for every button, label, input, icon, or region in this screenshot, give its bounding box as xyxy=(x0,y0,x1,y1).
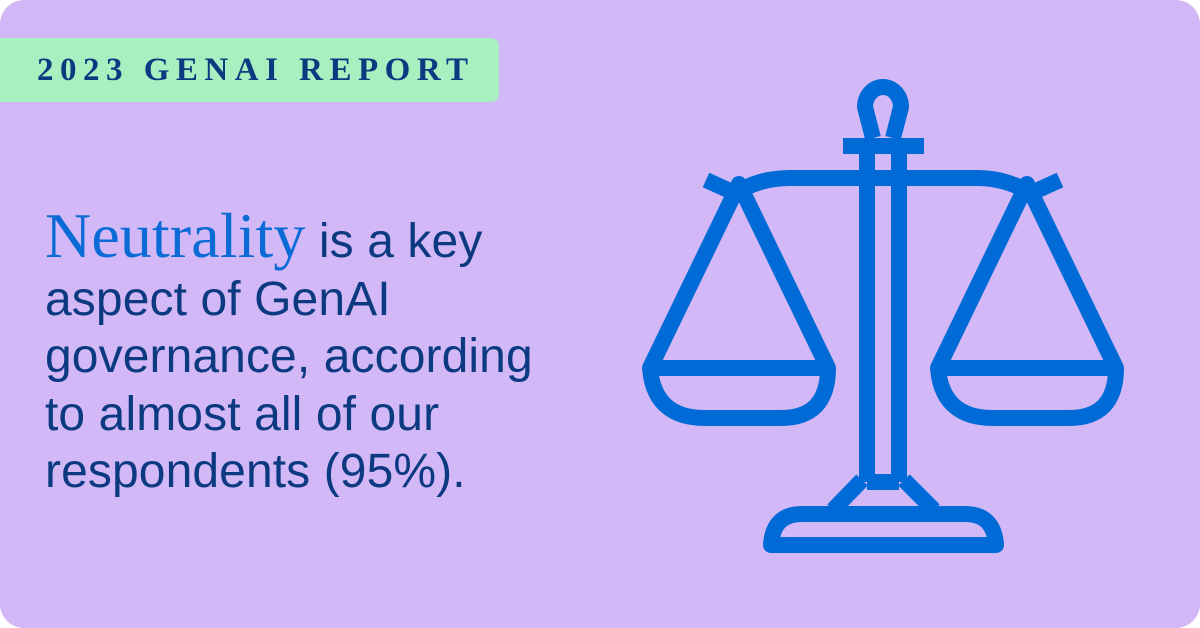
tag: report label xyxy=(0,38,499,102)
tag: report label: 2023 GENAI REPORT xyxy=(37,52,475,88)
loop xyxy=(865,87,901,138)
headline text: aspect of GenAI xyxy=(45,272,391,326)
headline text: respondents (95%). xyxy=(45,445,466,498)
foot xyxy=(771,514,996,545)
crossbar xyxy=(843,138,924,154)
headline text xyxy=(45,200,533,498)
beam xyxy=(745,178,1021,188)
pillar xyxy=(859,154,875,482)
headline text: governance, according xyxy=(45,330,533,383)
headline text: to almost all of our xyxy=(45,388,439,440)
right pan xyxy=(938,184,1116,368)
headline text: Neutrality is a key xyxy=(45,200,482,271)
base trapezoid xyxy=(833,480,934,510)
left pan xyxy=(650,184,828,368)
